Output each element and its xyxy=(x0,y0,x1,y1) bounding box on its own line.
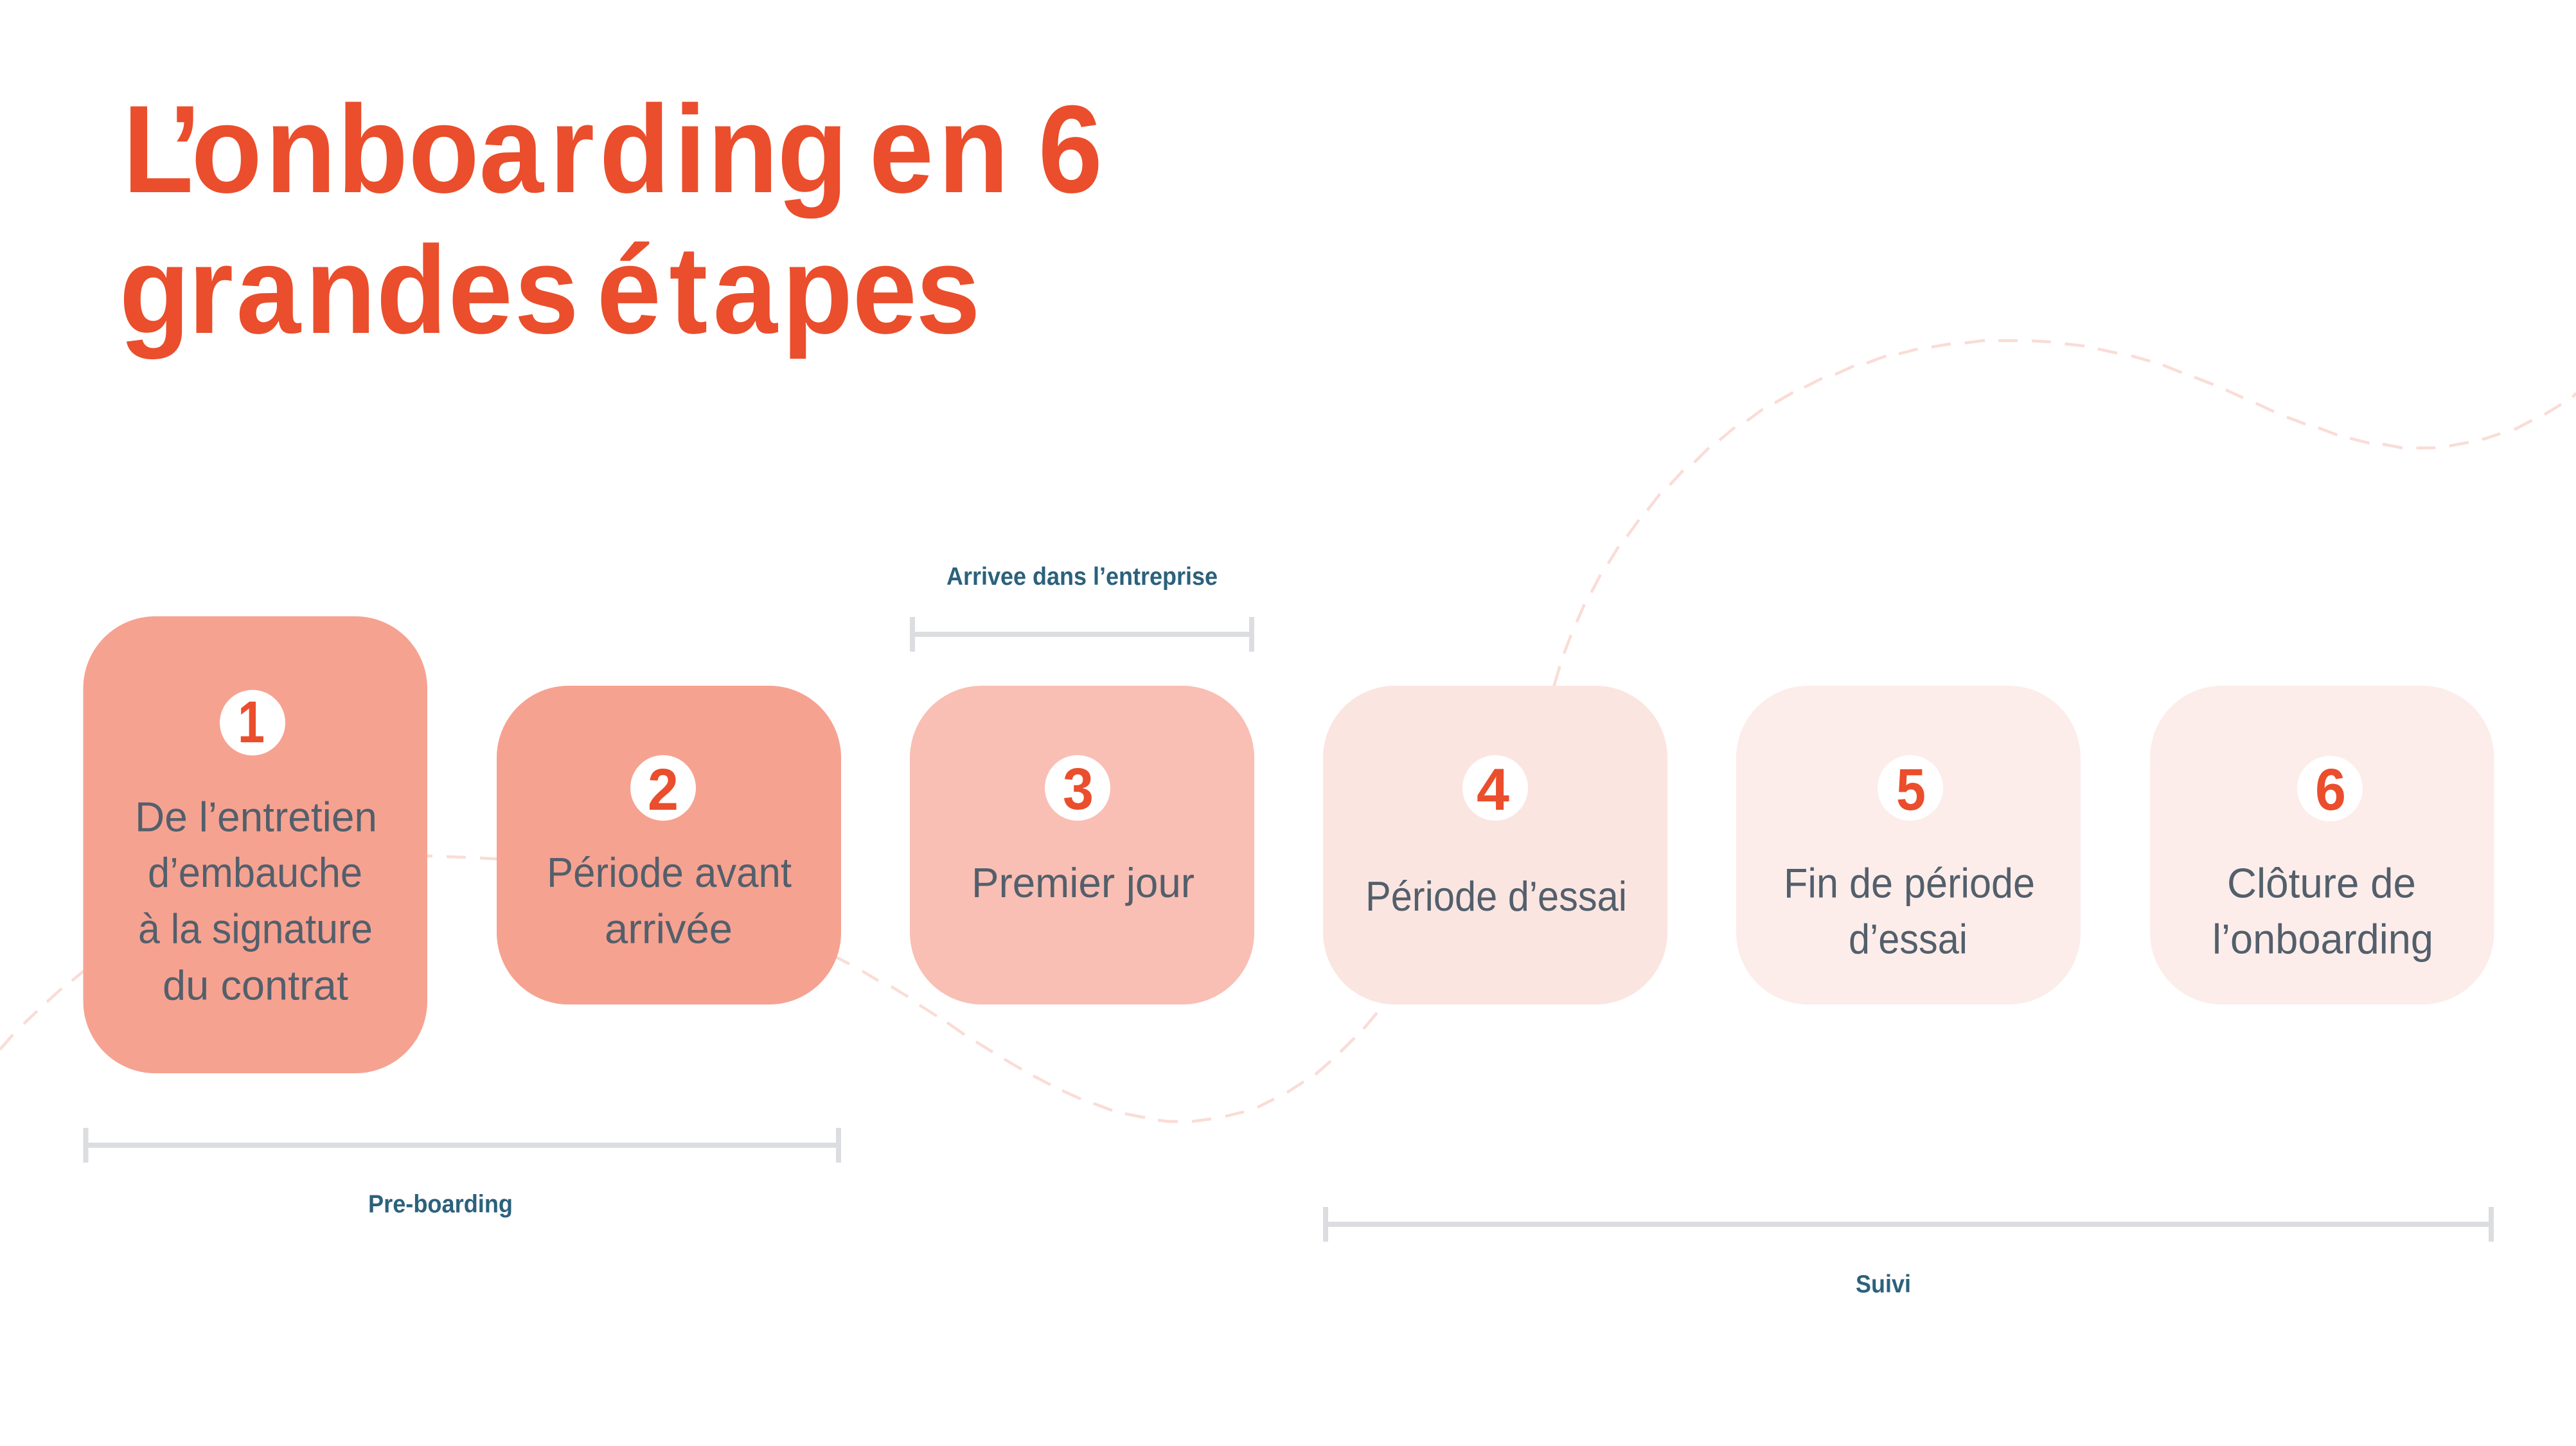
badge 5: 5 xyxy=(1896,757,1926,823)
panel: step 3 xyxy=(910,686,1254,1004)
text step 6 xyxy=(2212,860,2433,963)
text step 2: Période avant xyxy=(547,849,792,896)
panel: step 2 xyxy=(497,686,841,1004)
panel: step 1 xyxy=(84,616,427,1073)
card 5 background xyxy=(1736,686,2081,1004)
text step 1: De l’entretien xyxy=(135,793,377,841)
panel: step 6 xyxy=(2150,686,2494,1004)
bracket: arrivée dans l'entreprise xyxy=(910,617,1254,652)
title xyxy=(120,79,1103,359)
text step 5: d’essai xyxy=(1849,915,1968,963)
label: suivi: Suivi xyxy=(1856,1271,1911,1298)
badge 4 xyxy=(1462,755,1528,823)
card 1 background xyxy=(84,616,427,1073)
text step 2: arrivée xyxy=(605,905,733,952)
badge 2: 2 xyxy=(648,757,679,823)
text step 5 xyxy=(1784,860,2035,963)
badge 6: 6 xyxy=(2315,757,2346,823)
badge 2 xyxy=(630,755,696,823)
badge 4: 4 xyxy=(1477,757,1509,823)
title: grandes étapes xyxy=(120,220,981,359)
card 2 background xyxy=(497,686,841,1004)
panel: step 5 xyxy=(1736,686,2081,1004)
badge 3: 3 xyxy=(1063,756,1094,822)
card 3 background xyxy=(910,686,1254,1004)
bracket: pre-boarding xyxy=(84,1128,841,1163)
text step 1: du contrat xyxy=(163,961,348,1009)
text step 4: Période d’essai xyxy=(1365,873,1627,920)
card 4 background xyxy=(1323,686,1667,1004)
text step 1 xyxy=(135,793,377,1009)
badge 3 xyxy=(1045,755,1110,822)
panel: step 4 xyxy=(1323,686,1667,1004)
text step 2 xyxy=(547,849,792,952)
label: pre-boarding: Pre-boarding xyxy=(368,1190,513,1218)
text step 6: Clôture de xyxy=(2227,860,2416,906)
badge 5 xyxy=(1878,755,1943,823)
text step 1: à la signature xyxy=(138,905,373,952)
label: arrivee dans l'entreprise: Arrivee dans l’entreprise xyxy=(946,563,1218,591)
badge 1 xyxy=(220,690,285,756)
text step 5: Fin de période xyxy=(1784,860,2035,906)
dashed wave connector xyxy=(0,341,2576,1121)
card 6 background xyxy=(2150,686,2494,1004)
badge 1: 1 xyxy=(238,690,265,755)
title: L’onboarding en 6 xyxy=(123,79,1103,219)
text step 3: Premier jour xyxy=(972,859,1195,906)
text step 1: d’embauche xyxy=(148,849,362,896)
text step 6: l’onboarding xyxy=(2212,915,2433,963)
badge 6 xyxy=(2297,756,2363,823)
bracket: suivi xyxy=(1323,1207,2494,1242)
